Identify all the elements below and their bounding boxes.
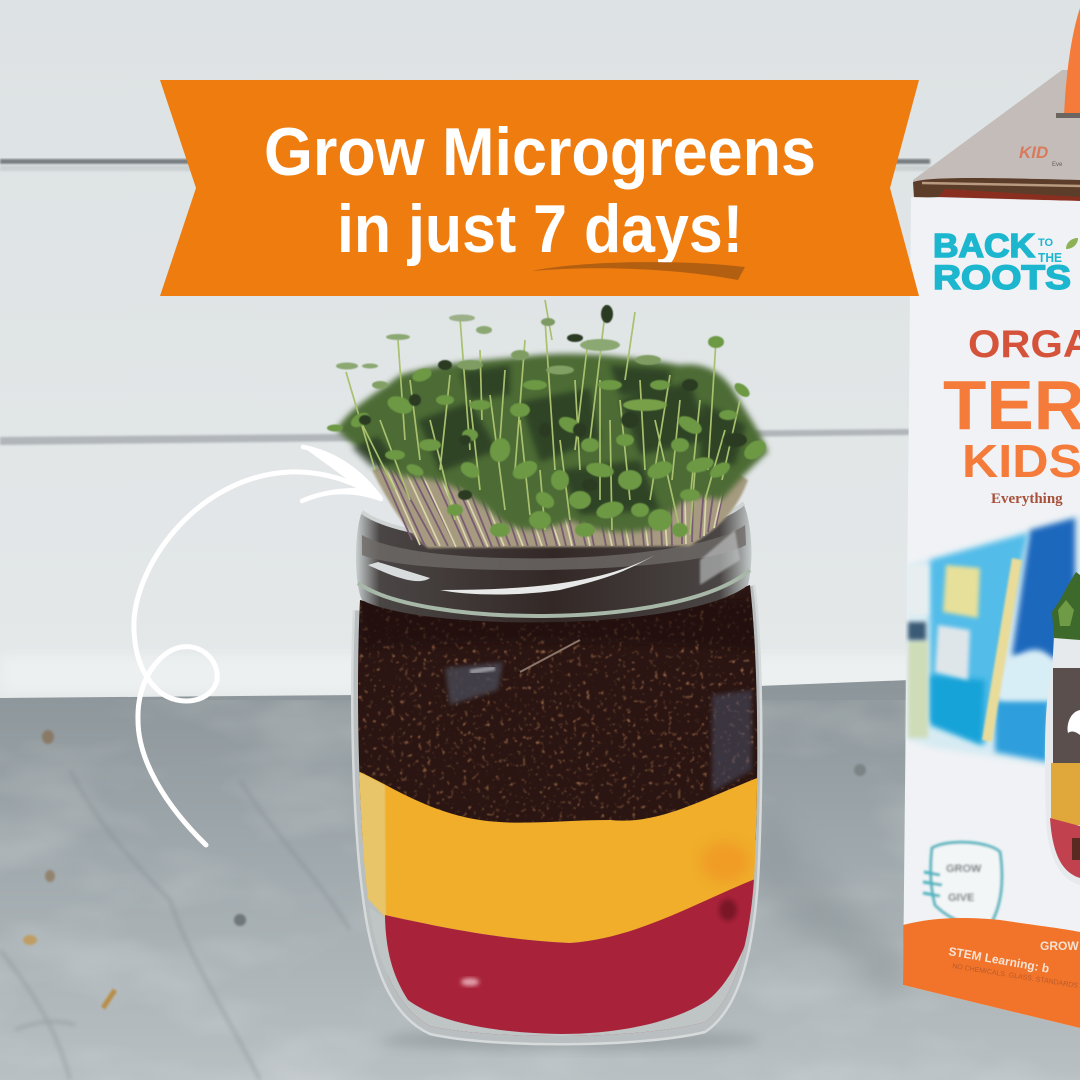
curly white arrow — [134, 447, 381, 845]
box badge: GIVE — [948, 892, 974, 904]
layer: red sand — [385, 875, 765, 1040]
box badge: GROW — [946, 863, 982, 875]
box orange band — [903, 918, 1080, 1030]
sprout leaves — [327, 314, 769, 537]
sprout green stems — [346, 300, 740, 535]
box logo: THE — [1038, 250, 1062, 265]
box logo — [933, 227, 1078, 297]
box mini jar — [1045, 632, 1080, 885]
box logo: TO — [1038, 237, 1054, 249]
sprout green mass — [336, 354, 768, 532]
microgreens sprouts — [327, 300, 769, 548]
box photo area — [908, 515, 1080, 885]
box title text: KIDS — [962, 435, 1080, 487]
jar body — [352, 585, 761, 1044]
orange title banner: in just 7 days! — [337, 191, 743, 267]
layer: soil — [340, 580, 770, 840]
box top flap — [913, 70, 1080, 190]
box logo: BACK — [933, 227, 1035, 264]
banner heading: Grow Microgreens — [264, 114, 816, 190]
box orange band: NO CHEMICALS. GLASS. STANDARDS — [952, 963, 1079, 990]
flap lettering: KID — [1019, 143, 1048, 162]
sprout pale stems base — [372, 450, 748, 548]
cardboard edge — [913, 178, 1080, 200]
shadow under jar — [380, 1030, 760, 1050]
product box: back to the roots kit: Eve — [1052, 162, 1063, 168]
background: white plank wall — [0, 0, 1080, 710]
box logo: ROOTS — [933, 259, 1071, 297]
box orange band: GROW — [1040, 939, 1079, 953]
box orange band: STEM Learning: b — [947, 944, 1050, 976]
box title text: Everything — [991, 491, 1063, 507]
product box: back to the roots kit — [903, 8, 1080, 1030]
box title text: TER — [943, 366, 1080, 444]
brush underline — [532, 262, 745, 280]
sprout dark shadows — [352, 365, 746, 515]
layer: yellow sand — [355, 770, 765, 943]
box front face — [903, 197, 1080, 1028]
jar neck — [356, 505, 751, 622]
box badge — [923, 842, 1002, 926]
background: grey marble table — [0, 680, 1080, 1080]
orange title banner — [160, 80, 919, 296]
pale glass base — [385, 918, 744, 1036]
box handle — [1064, 8, 1080, 116]
box title text — [943, 323, 1080, 507]
glass jar with layers — [340, 503, 770, 1045]
